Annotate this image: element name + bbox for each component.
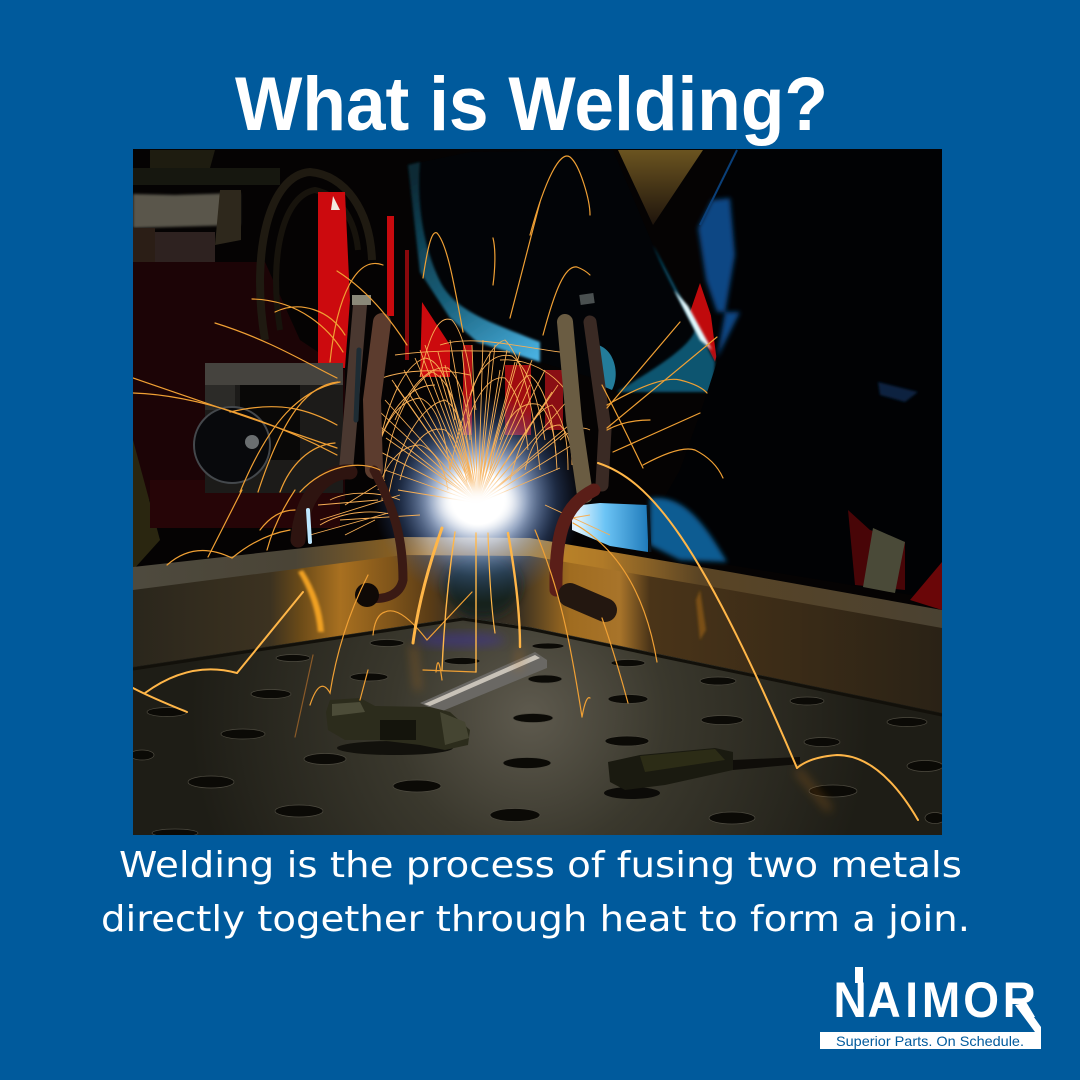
table holes [130,640,945,837]
purple floor glow [415,633,505,647]
logo: Naimor [820,967,1041,1049]
red panels [318,192,720,435]
workshop background [133,150,372,570]
logo: Naimor: NAIMOR [834,973,1036,1028]
title: What is Welding? [235,62,828,147]
table top [133,617,942,835]
jacket [695,150,918,403]
long spark streaks [133,156,723,737]
photo: welder and sparks [130,149,945,837]
background red and stone block [848,510,942,610]
neck [618,150,703,225]
body text: Welding is the process of fusing two metals [119,845,962,886]
welding helmet [408,150,715,392]
hammer and bar [326,652,547,755]
body text [101,845,970,940]
bright spark streaks [133,463,918,820]
body text: directly together through heat to form a join. [101,899,970,940]
flash core [440,481,516,525]
orange reflections on wall [298,570,706,640]
radial spark fan [310,319,610,535]
wall base shadow [133,619,942,715]
table front wall [133,552,942,713]
infographic canvas [103,75,1041,1049]
floor spark glow [413,645,830,810]
right locking pliers [556,298,605,610]
blue lit sleeve and flash [572,498,727,562]
table rail [133,537,942,628]
speaker / machine box and wheel [194,363,343,493]
dark wall area below flash [444,553,520,617]
weld flash [373,393,583,603]
logo: Naimor: Superior Parts. On Schedule. [836,1033,1024,1049]
left locking pliers [298,300,403,607]
rubber mallet handle [604,748,800,799]
